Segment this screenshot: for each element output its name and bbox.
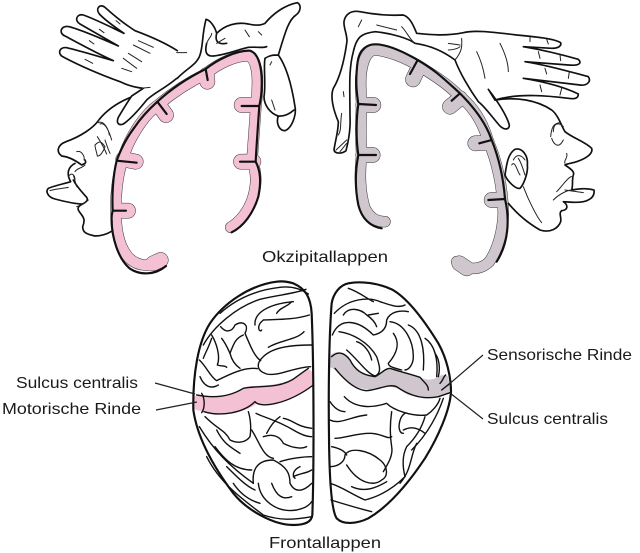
leader lines [155,355,483,419]
body and leg [177,3,300,131]
label: Sensorische Rinde: Sensorische Rinde [487,347,632,364]
hand creases [85,21,187,88]
label: Okzipitallappen: Okzipitallappen [262,249,388,266]
body details [207,30,275,110]
grey sensory band [330,352,451,398]
gyri lines [197,287,313,519]
head with ear [495,99,594,231]
hand [60,6,177,125]
facial details [512,123,583,223]
gyri lines [330,288,450,512]
left brain hemisphere [193,281,314,525]
tongue and facial details [50,122,112,207]
pink motor cortex ribbon [112,51,262,273]
pink motor band [193,369,314,414]
brain outline [329,282,451,523]
brain outline [193,281,314,525]
left homunculus: motor cortex [47,3,300,273]
grey sensory cortex ribbon [356,44,508,268]
label: Sulcus centralis right: Sulcus centralis [487,411,608,428]
face [47,97,131,236]
label: Sulcus centralis left: Sulcus centralis [16,375,138,392]
label: Frontallappen: Frontallappen [269,535,381,552]
leg and arm [332,11,589,153]
label: Motorische Rinde: Motorische Rinde [2,401,141,418]
arm and hand creases [336,20,569,152]
right homunculus: sensory cortex [332,11,594,268]
right brain hemisphere [329,282,451,523]
